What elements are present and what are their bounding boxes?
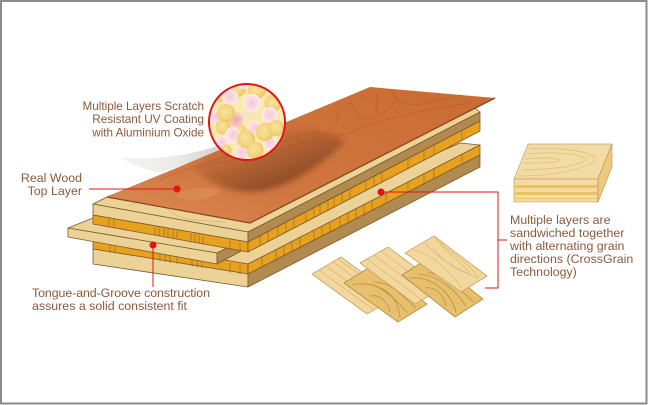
coating swoosh bbox=[119, 146, 225, 172]
callout: top layer leader bbox=[89, 186, 180, 192]
tongue board bbox=[68, 218, 262, 264]
callout text: crossgrain: directions (CrossGrain bbox=[510, 252, 633, 266]
callout text: crossgrain: Technology) bbox=[510, 265, 577, 279]
callout text: tongue and groove bbox=[32, 286, 210, 313]
callout text: tongue and groove: assures a solid consistent fit bbox=[32, 299, 188, 313]
icon: assembled plywood block bbox=[514, 144, 612, 202]
callout text: UV coating bbox=[83, 100, 204, 140]
callout text: UV coating: with Aluminium Oxide bbox=[91, 126, 204, 140]
callout text: real wood top layer: Top Layer bbox=[28, 184, 82, 198]
board: center light bbox=[360, 246, 429, 304]
callout text: UV coating: Resistant UV Coating bbox=[92, 113, 204, 126]
veneer shadow and grain bbox=[160, 90, 470, 200]
callout text: crossgrain bbox=[509, 213, 633, 279]
icon: cross-grain boards bbox=[312, 236, 487, 322]
lower stack bbox=[93, 143, 480, 287]
callout text: real wood top layer bbox=[21, 171, 82, 198]
board: dark right bbox=[402, 257, 483, 317]
callout text: UV coating: Multiple Layers Scratch bbox=[83, 100, 204, 113]
board: dark middle bbox=[344, 265, 427, 322]
callout: crossgrain leader bbox=[378, 188, 507, 288]
callout text: crossgrain: with alternating grain bbox=[509, 239, 624, 253]
flooring plank cross-section bbox=[68, 87, 495, 287]
callout text: crossgrain: Multiple layers are bbox=[510, 213, 611, 227]
callout text: crossgrain: sandwiched together bbox=[510, 226, 624, 240]
callout text: real wood top layer: Real Wood bbox=[21, 171, 82, 185]
board: left light bbox=[312, 256, 378, 314]
magnified coating circle bbox=[208, 77, 285, 160]
board: top right light bbox=[405, 236, 487, 292]
callout: tongue leader bbox=[150, 242, 156, 287]
upper stack bbox=[93, 90, 480, 252]
callout text: tongue and groove: Tongue-and-Groove construction bbox=[32, 286, 210, 300]
real wood top veneer bbox=[107, 87, 495, 223]
